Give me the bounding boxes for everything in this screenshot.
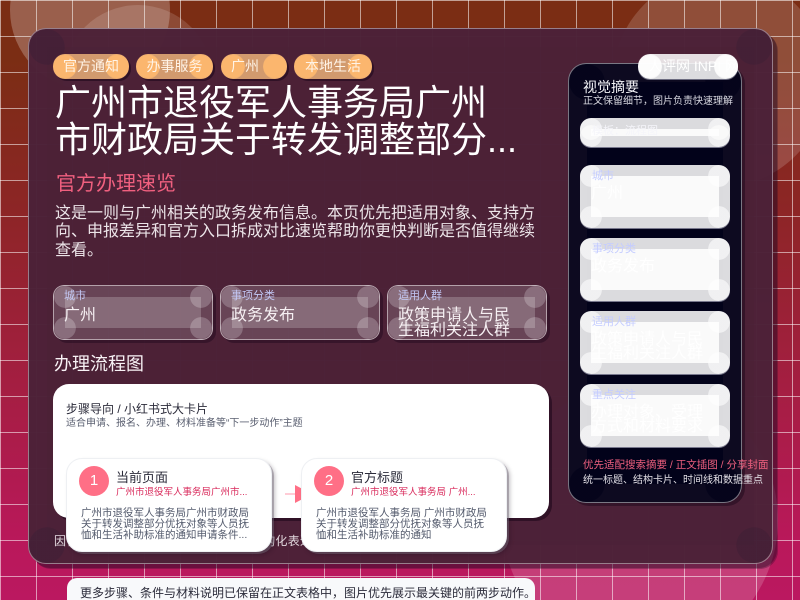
bottom note xyxy=(67,578,535,600)
meta card: 事项分类 xyxy=(220,285,380,340)
step 2 body: 广州市退役军人事务局 广州市财政局关于转发调整部分优抚对象等人员抚恤和生活补助标准的通知 xyxy=(316,507,487,541)
summary heading: 视觉摘要 xyxy=(583,79,639,95)
tag: 本地生活: 本地生活 xyxy=(305,58,361,74)
summary card: 重点关注 xyxy=(580,384,730,447)
flow heading: 步骤导向 / 小红书式大卡片 xyxy=(66,402,208,416)
step 1 title: 当前页面 xyxy=(116,470,168,485)
title xyxy=(55,82,517,160)
caption behind steps: 因官方页面信息较长，这里仅作简要结构化表述 xyxy=(54,534,312,548)
tag: 广州: 广州 xyxy=(231,58,259,74)
summary card: 重点关注: 重点关注 xyxy=(592,389,636,401)
step 1 body: 广州市退役军人事务局广州市财政局关于转发调整部分优抚对象等人员抚恤和生活补助标准的通知申请条件... xyxy=(81,507,249,541)
summary card: 城市: 广州 xyxy=(591,185,623,202)
summary card: 事项分类 xyxy=(580,238,730,301)
tag: 办事服务: 办事服务 xyxy=(146,58,202,74)
meta card: 城市 xyxy=(53,285,213,340)
meta card: 事项分类: 事项分类 xyxy=(231,290,275,302)
subtitle: 官方办理速览 xyxy=(56,173,176,195)
flow sub heading: 适合申请、报名、办理、材料准备等“下一步动作”主题 xyxy=(66,418,303,429)
source chip xyxy=(638,54,738,79)
tag: 官方通知: 官方通知 xyxy=(63,58,119,74)
step number 1 xyxy=(79,466,109,496)
arrow between steps xyxy=(285,485,301,503)
template card xyxy=(580,118,730,147)
step number 2 xyxy=(314,466,344,496)
title: 市财政局关于转发调整部分... xyxy=(55,119,517,160)
summary footer accent: 优先适配搜索摘要 / 正文插图 / 分享封面 xyxy=(583,459,769,471)
tag: 官方通知 xyxy=(53,54,129,79)
meta card: 城市: 城市 xyxy=(64,290,86,302)
summary card: 城市 xyxy=(580,165,730,228)
summary card: 事项分类: 事项分类 xyxy=(592,243,636,255)
source chip: 人评网 INPI 网 xyxy=(648,58,738,74)
summary card: 城市: 城市 xyxy=(592,170,614,182)
meta card: 城市: 广州 xyxy=(64,307,96,324)
section heading: 办理流程图 xyxy=(54,354,144,374)
title: 广州市退役军人事务局广州 xyxy=(55,82,487,123)
step 2 subtitle: 广州市退役军人事务局 广州... xyxy=(351,487,476,498)
step number 1: 1 xyxy=(90,472,98,489)
intro text: 这是一则与广州相关的政务发布信息。本页优先把适用对象、支持方向、申报差异和官方入口拆成对比速览帮助你更快判断是否值得继续查看。 xyxy=(55,205,535,259)
tag: 办事服务 xyxy=(136,54,213,79)
summary card: 适用人群: 适用人群 xyxy=(592,316,636,328)
template card: 模板：流程图 xyxy=(592,125,658,137)
step 1 subtitle: 广州市退役军人事务局广州市... xyxy=(116,487,247,498)
tag: 本地生活 xyxy=(294,54,372,79)
step card 1 xyxy=(66,458,272,552)
step card 2 xyxy=(301,458,507,552)
step 2 title: 官方标题 xyxy=(351,470,403,485)
meta card: 适用人群: 政策申请人与民生福利关注人群 xyxy=(398,307,510,339)
meta card: 事项分类: 政务发布 xyxy=(231,307,295,324)
panel: visual summary xyxy=(568,63,742,503)
summary card: 重点关注: 办理对象、受理方式和材料要求 xyxy=(591,404,703,435)
summary card: 事项分类: 政务发布 xyxy=(591,258,655,275)
summary footer text: 统一标题、结构卡片、时间线和数据重点 xyxy=(583,475,763,486)
meta card: 适用人群: 适用人群 xyxy=(398,290,442,302)
meta card: 适用人群 xyxy=(387,285,547,340)
summary sub heading: 正文保留细节，图片负责快速理解 xyxy=(583,96,733,107)
panel: flow chart card xyxy=(53,384,549,518)
summary card: 适用人群: 政策申请人与民生福利关注人群 xyxy=(591,331,703,362)
summary card: 适用人群 xyxy=(580,311,730,374)
bottom note: 更多步骤、条件与材料说明已保留在正文表格中，图片优先展示最关键的前两步动作。 xyxy=(80,586,535,600)
tag: 广州 xyxy=(221,54,287,79)
step number 2: 2 xyxy=(325,472,333,489)
